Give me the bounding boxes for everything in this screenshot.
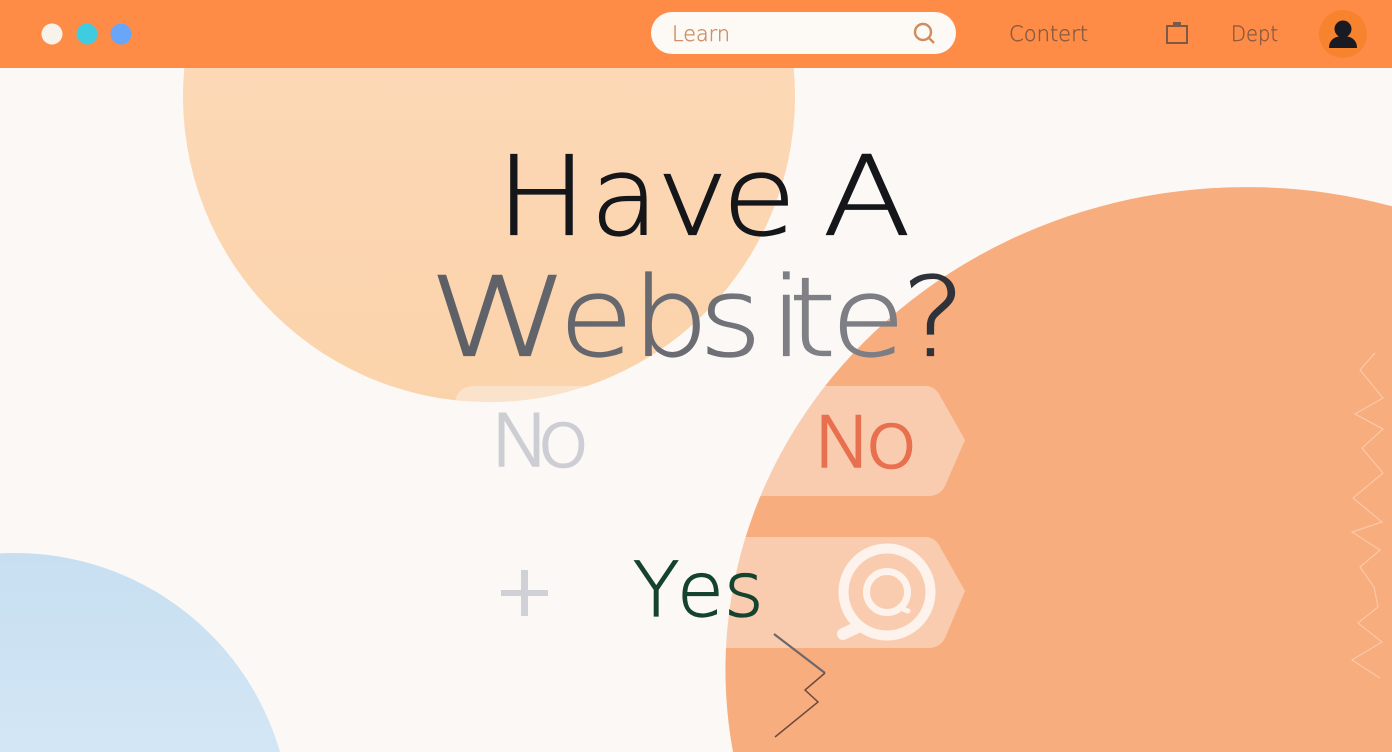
answer pill: yes (455, 537, 965, 648)
label: no muted: o (536, 393, 591, 485)
label: no orange: N (813, 402, 873, 484)
window dot: white (42, 24, 62, 44)
window dot: blue (110, 24, 132, 44)
window dot: cyan (76, 24, 98, 44)
icon: speech bubble (843, 548, 930, 636)
title line 1: a (590, 134, 659, 261)
title (428, 134, 966, 382)
icon: search (915, 24, 934, 43)
peach circle (183, 68, 795, 402)
orange circle (725, 187, 1392, 752)
label: yes: Yes (633, 545, 764, 634)
search placeholder: Learn (672, 22, 730, 46)
navigation bar (0, 0, 1392, 68)
nav item: dept: Dept (1231, 22, 1278, 46)
title line 1: ve (657, 134, 830, 261)
arrow: zigzag (774, 634, 825, 737)
label: no muted: N (490, 400, 551, 484)
icon: plus (501, 570, 548, 616)
nav item: content: Contert (1009, 22, 1088, 46)
title line 2: W (428, 255, 569, 382)
icon: user avatar (1319, 10, 1367, 58)
label: no orange: o (864, 394, 919, 486)
title line 2: ebsite? (559, 255, 966, 382)
search field (651, 12, 956, 54)
zigzag decoration (1352, 353, 1383, 678)
title line 1: A (823, 134, 911, 261)
blue circle (0, 553, 280, 752)
title line 1: H (496, 134, 587, 261)
answer pill: no (455, 386, 965, 496)
icon: clipboard (1167, 22, 1187, 43)
